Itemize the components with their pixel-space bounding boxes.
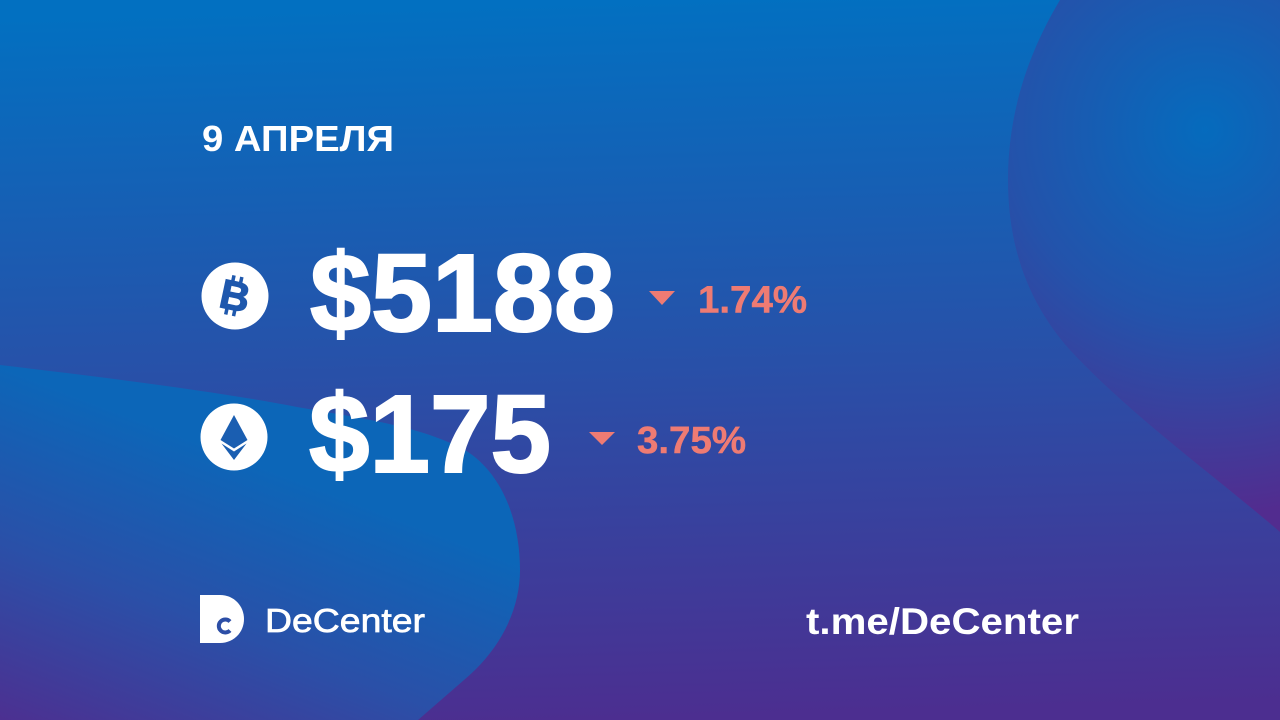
row: bitcoin bbox=[202, 232, 807, 355]
down arrow: bitcoin bbox=[649, 291, 675, 305]
down arrow: ethereum bbox=[589, 432, 615, 445]
bitcoin change: 1.74% bbox=[698, 280, 807, 322]
bitcoin price: $5188 bbox=[310, 232, 615, 355]
icon: ethereum bbox=[200, 404, 268, 470]
icon: DeCenter mark bbox=[200, 595, 244, 643]
date heading: 9 АПРЕЛЯ bbox=[202, 118, 394, 159]
decorative blob: bottom left bbox=[0, 365, 520, 720]
icon: bitcoin bbox=[202, 262, 268, 330]
row: ethereum bbox=[200, 373, 746, 496]
decorative blob: top right bbox=[1008, 0, 1280, 532]
ethereum change: 3.75% bbox=[637, 420, 746, 462]
wordmark: DeCenter bbox=[265, 602, 425, 639]
icon: bitcoin: B bbox=[216, 270, 254, 322]
channel link: t.me/DeCenter bbox=[806, 601, 1079, 642]
ethereum price: $175 bbox=[309, 373, 551, 496]
logo: DeCenter bbox=[200, 595, 425, 643]
